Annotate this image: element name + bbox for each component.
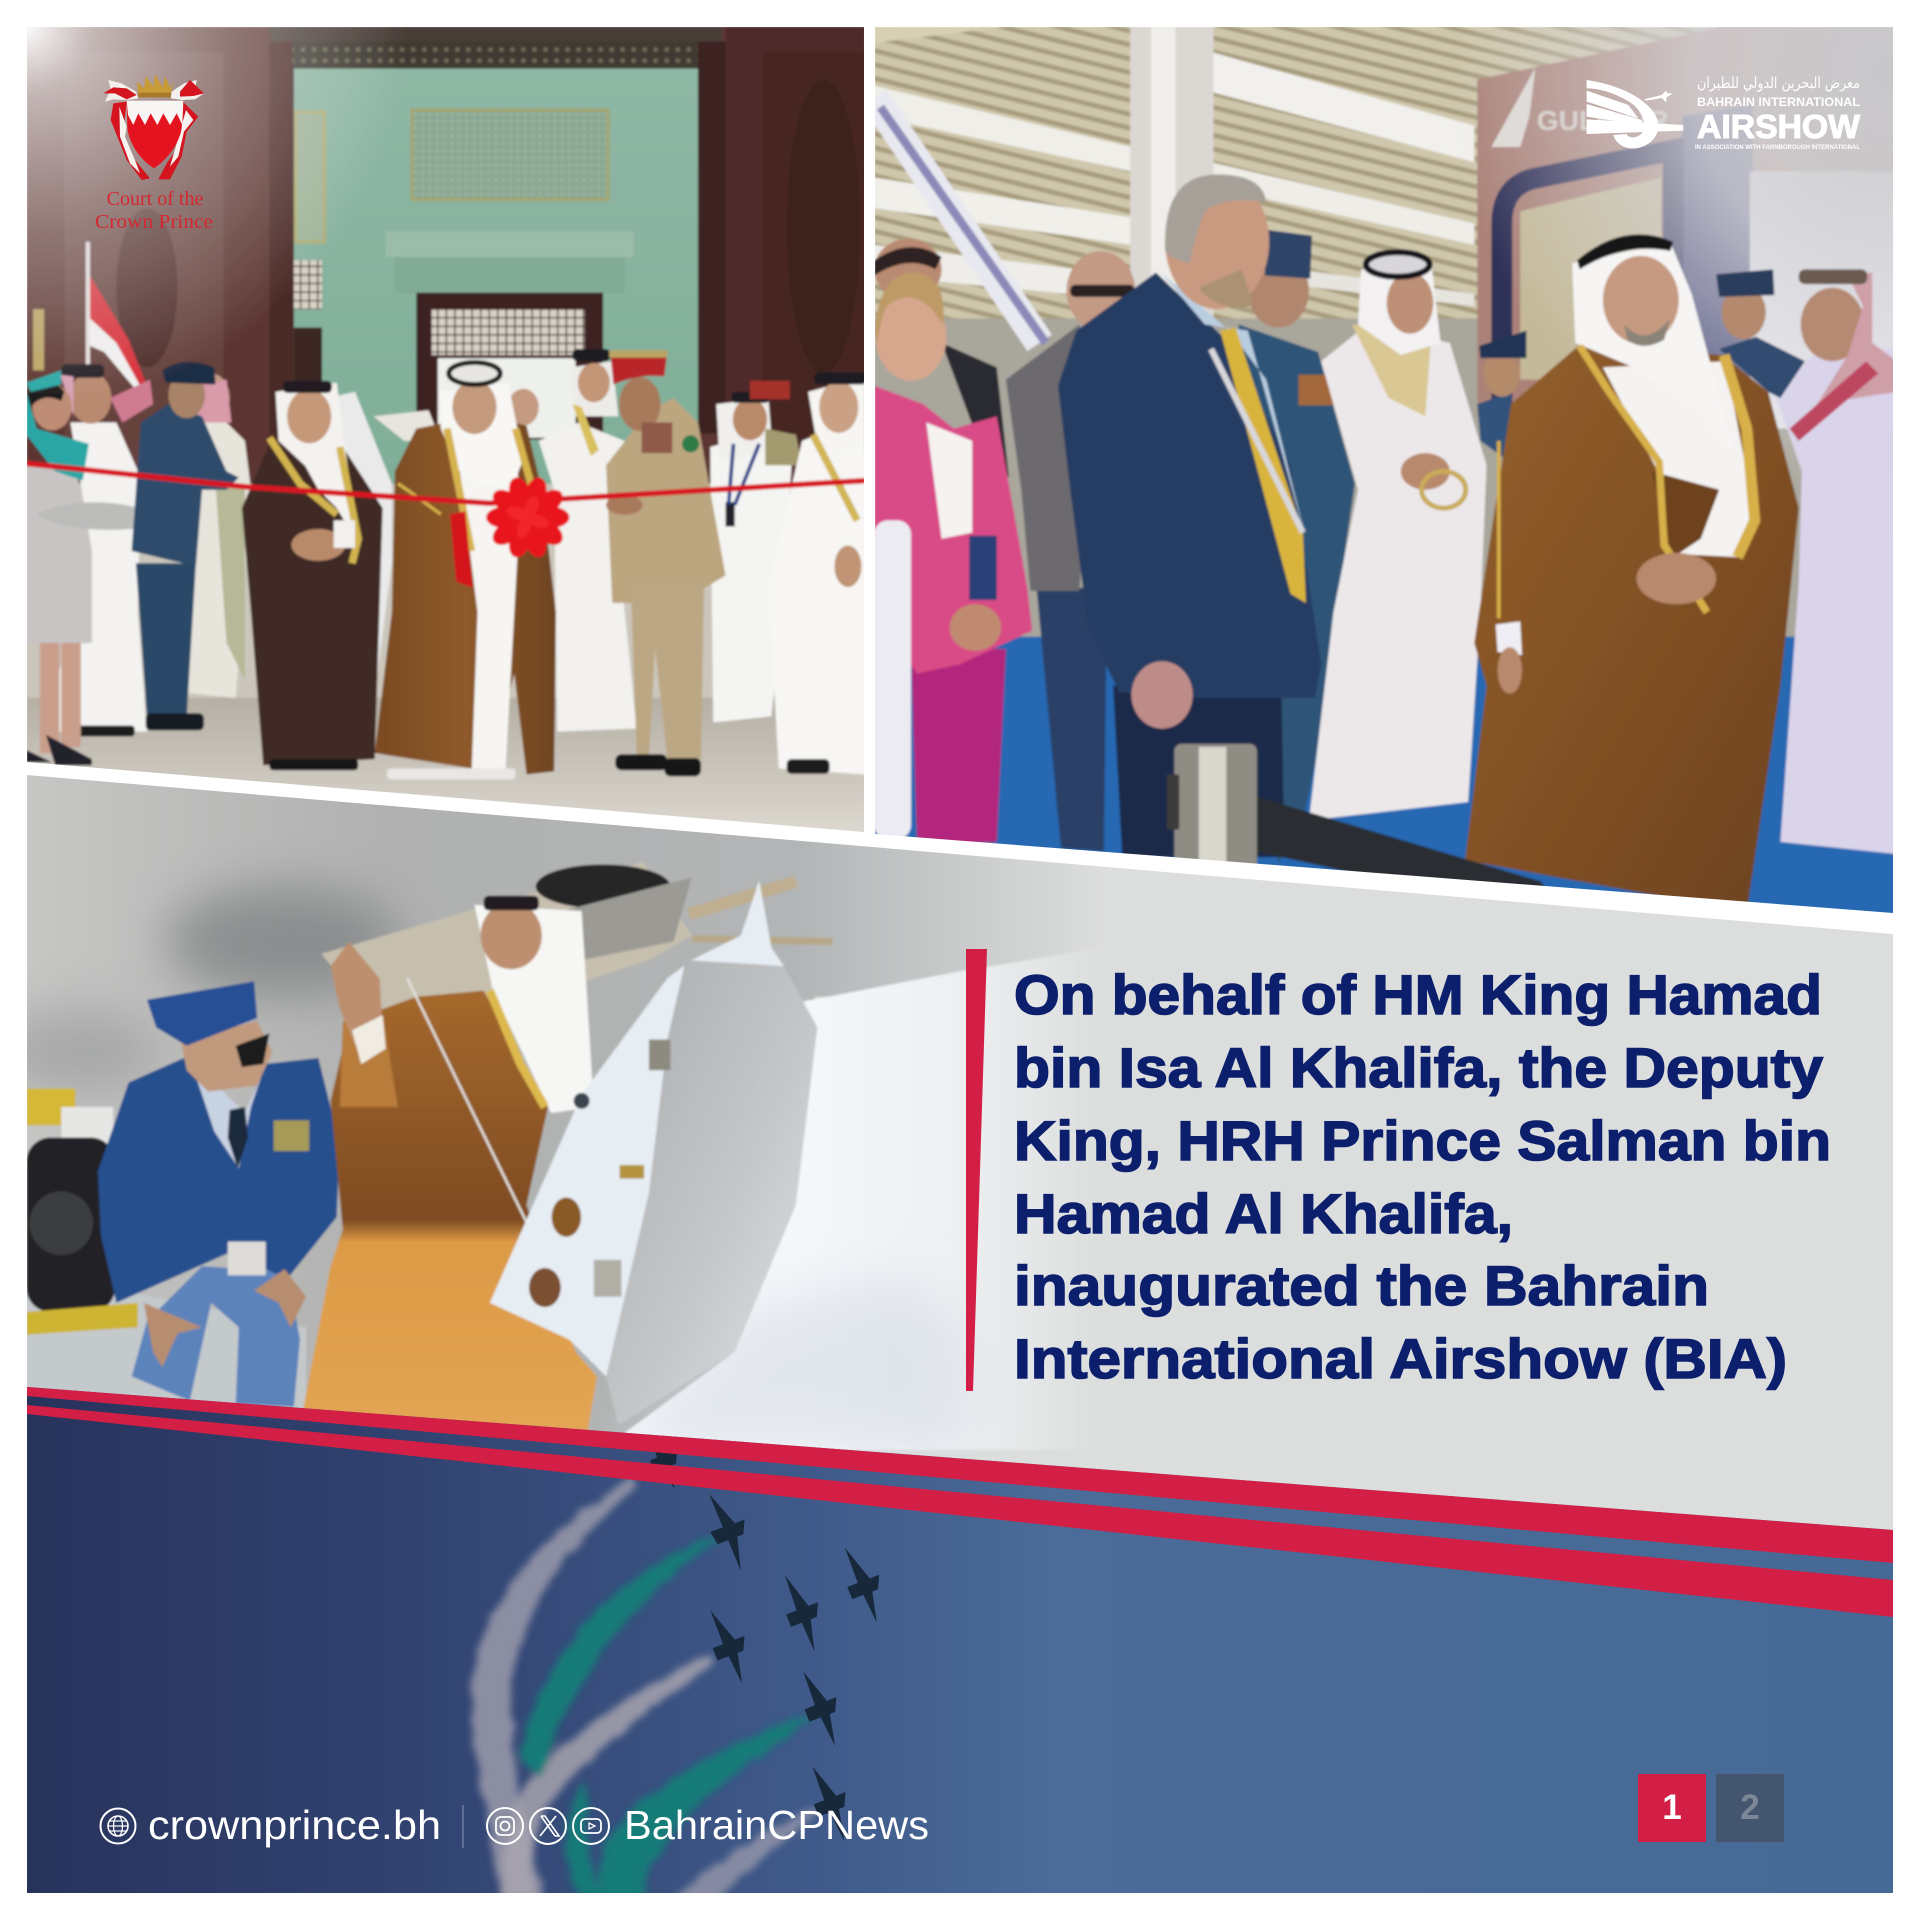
icon: airshow wing emblem — [1587, 80, 1683, 148]
top-left white fade — [27, 27, 392, 394]
doorway architecture — [27, 27, 864, 700]
military officer in khaki — [606, 350, 726, 776]
fuselage underside — [0, 752, 1920, 1920]
page 1 active — [1638, 1774, 1706, 1842]
stand signage: GULF AIR — [1537, 105, 1669, 136]
floor — [26, 698, 865, 839]
page 2 inactive — [1716, 1774, 1784, 1842]
landing gear wheel — [26, 1089, 138, 1335]
accent bar — [966, 949, 987, 1391]
red ribbon and bow — [26, 463, 865, 588]
woman in pink suit — [874, 272, 1032, 845]
icon: Bahrain coat of arms — [103, 74, 204, 180]
website address: crownprince.bh — [148, 1802, 441, 1848]
page 2 inactive: 2 — [1740, 1788, 1760, 1827]
dignitary in white robe — [1309, 252, 1487, 820]
attendant in headdress and robe — [1716, 269, 1897, 854]
junior officer — [1477, 331, 1526, 465]
His Royal Highness in brown bisht with gold trim — [1465, 234, 1799, 912]
headline: Hamad Al Khalifa, — [1014, 1182, 1513, 1245]
page 1 active: 1 — [1662, 1788, 1682, 1827]
His Royal Highness in brown bisht — [375, 362, 556, 779]
headline: inaugurated the Bahrain — [1014, 1254, 1709, 1317]
logo: Bahrain International Airshow: IN ASSOCIATION WITH FARNBOROUGH INTERNATIONAL — [1695, 144, 1860, 151]
blue carpet — [874, 637, 1897, 918]
headline: On behalf of HM King Hamad — [1014, 963, 1822, 1026]
top-right pale fade — [1476, 27, 1893, 468]
logo: Court of the Crown Prince — [95, 74, 213, 233]
air force commander — [1239, 230, 1355, 863]
logo wording: Court of the — [107, 188, 203, 210]
decorative red diagonal stripes — [27, 1387, 1893, 1617]
panel: sky with aerobatic jets — [27, 1380, 1897, 1900]
icon: instagram — [487, 1808, 523, 1844]
social handle: BahrainCPNews — [624, 1802, 929, 1848]
man in white with red headdress — [58, 362, 154, 738]
dignitary in dark bisht — [242, 381, 383, 770]
logo: Bahrain International Airshow — [1587, 74, 1861, 151]
panel: aircraft inspection photo and headline background — [0, 752, 1920, 1920]
headline: bin Isa Al Khalifa, the Deputy — [1014, 1036, 1823, 1099]
footer: website and social handles — [100, 1802, 929, 1848]
dignitary in white at right — [768, 372, 866, 774]
headline: King, HRH Prince Salman bin — [1014, 1109, 1831, 1172]
logo: Court of the Crown Prince: Crown Prince — [95, 211, 213, 233]
photo: ribbon cutting ceremony — [26, 26, 866, 839]
His Royal Highness raising hand — [303, 896, 597, 1431]
air force officer — [132, 362, 239, 730]
jets in formation — [648, 1428, 879, 1841]
logo: Bahrain International Airshow: AIRSHOW — [1697, 108, 1861, 145]
man in grey suit — [1006, 251, 1135, 851]
man behind woman — [874, 239, 1009, 478]
icon: YouTube — [573, 1808, 609, 1844]
page indicator — [1638, 1774, 1784, 1842]
exhibition hall ceiling — [874, 26, 1897, 700]
flag — [84, 240, 146, 388]
air force colonel — [98, 981, 340, 1407]
people, rear row — [178, 349, 802, 732]
Gulf Air stand — [1477, 26, 1897, 429]
stewardess — [27, 369, 136, 767]
headline: International Airshow (BIA) — [1014, 1327, 1787, 1390]
headline — [1014, 963, 1831, 1390]
logo: Bahrain International Airshow: معرض البحرين الدولي للطيران — [1697, 74, 1860, 93]
man in navy suit — [1058, 174, 1321, 857]
icon: X — [530, 1808, 566, 1844]
open hatch above — [321, 862, 833, 1033]
smoke trails — [471, 1477, 819, 1900]
icon: globe — [100, 1808, 136, 1844]
barrier stanchion and belt — [1167, 744, 1560, 918]
photo: exhibition stand walkthrough — [874, 26, 1897, 918]
open aircraft door — [490, 880, 817, 1425]
logo: Bahrain International Airshow: BAHRAIN INTERNATIONAL — [1697, 95, 1860, 109]
